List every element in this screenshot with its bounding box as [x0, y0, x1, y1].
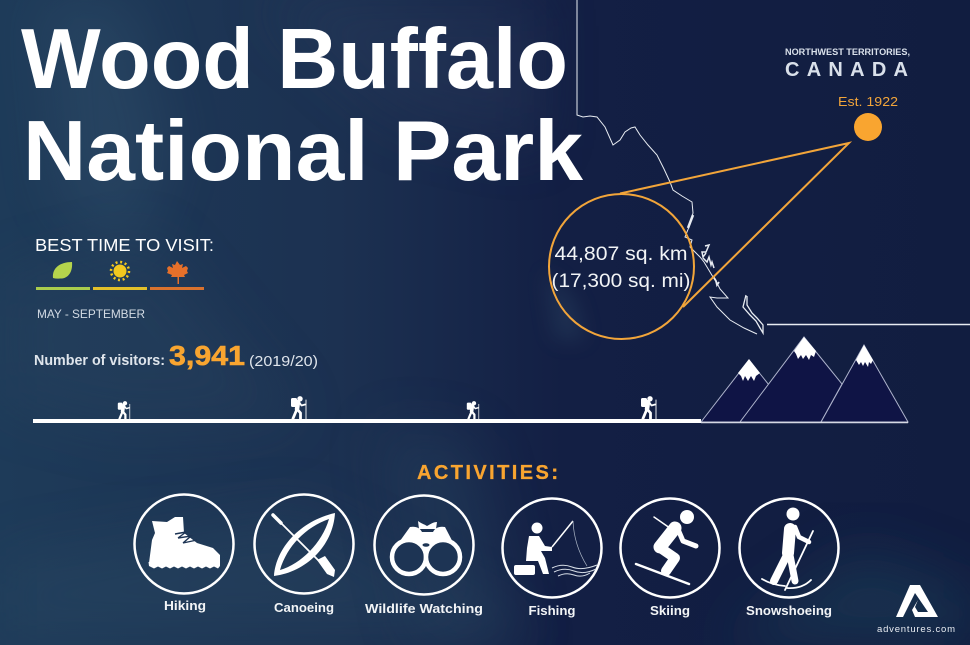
spring bar — [36, 287, 90, 290]
timeline ground — [33, 419, 701, 423]
icon: boot — [148, 517, 220, 568]
icon: hiker 1 — [118, 401, 130, 419]
title: Wood Buffalo — [21, 12, 568, 107]
season icons — [36, 261, 204, 290]
mountains — [701, 337, 908, 422]
activities heading: ACTIVITIES: — [417, 462, 558, 484]
established marker — [838, 94, 898, 141]
label: Hiking — [164, 598, 206, 613]
icon: hiker 4 — [641, 396, 656, 419]
activity: fishing — [502, 498, 602, 618]
label: Canoeing — [274, 600, 334, 615]
icon: skier — [636, 510, 696, 584]
callout: park area — [549, 143, 849, 339]
park area text: 44,807 sq. km — [554, 244, 688, 265]
activity: hiking — [134, 494, 234, 613]
icon: hiker 2 — [291, 396, 306, 419]
label: Skiing — [650, 603, 690, 618]
location label — [785, 47, 910, 81]
label: Snowshoeing — [746, 603, 832, 618]
icon: canoe and paddle — [273, 513, 335, 577]
established marker: Est. 1922 — [838, 94, 898, 109]
map outline: western Canada border — [577, 0, 970, 334]
logo: adventures.com: adventures.com — [877, 624, 955, 635]
mountain snow caps — [738, 337, 873, 381]
icon: angler — [514, 521, 597, 576]
location label: CANADA — [785, 59, 908, 81]
icon: summer sun — [111, 262, 129, 280]
visitor count: (2019/20) — [249, 354, 318, 370]
autumn bar — [150, 287, 204, 290]
activity: wildlife watching — [365, 496, 483, 616]
visitor count — [34, 340, 318, 371]
season months: MAY - SEPTEMBER — [37, 307, 145, 321]
icon: snowshoer — [762, 508, 813, 590]
logo: adventures.com — [877, 585, 955, 635]
label: Fishing — [528, 603, 576, 618]
icon: autumn maple leaf — [167, 261, 188, 284]
icon: spring leaf — [53, 262, 72, 279]
title — [21, 12, 584, 199]
label: Wildlife Watching — [365, 601, 483, 616]
summer bar — [93, 287, 147, 290]
icon: binoculars — [392, 521, 460, 574]
activity: snowshoeing — [740, 498, 838, 618]
best time to visit heading: BEST TIME TO VISIT: — [35, 235, 214, 255]
activity: canoeing — [254, 494, 354, 615]
location label: NORTHWEST TERRITORIES, — [785, 47, 910, 57]
visitor count: Number of visitors: — [34, 353, 165, 369]
icon: hiker 3 — [467, 401, 479, 419]
activity: skiing — [620, 498, 720, 618]
title: National Park — [23, 104, 584, 199]
visitor count: 3,941 — [169, 340, 245, 371]
callout: park area: (17,300 sq. mi) — [552, 271, 690, 292]
hikers — [118, 396, 656, 419]
